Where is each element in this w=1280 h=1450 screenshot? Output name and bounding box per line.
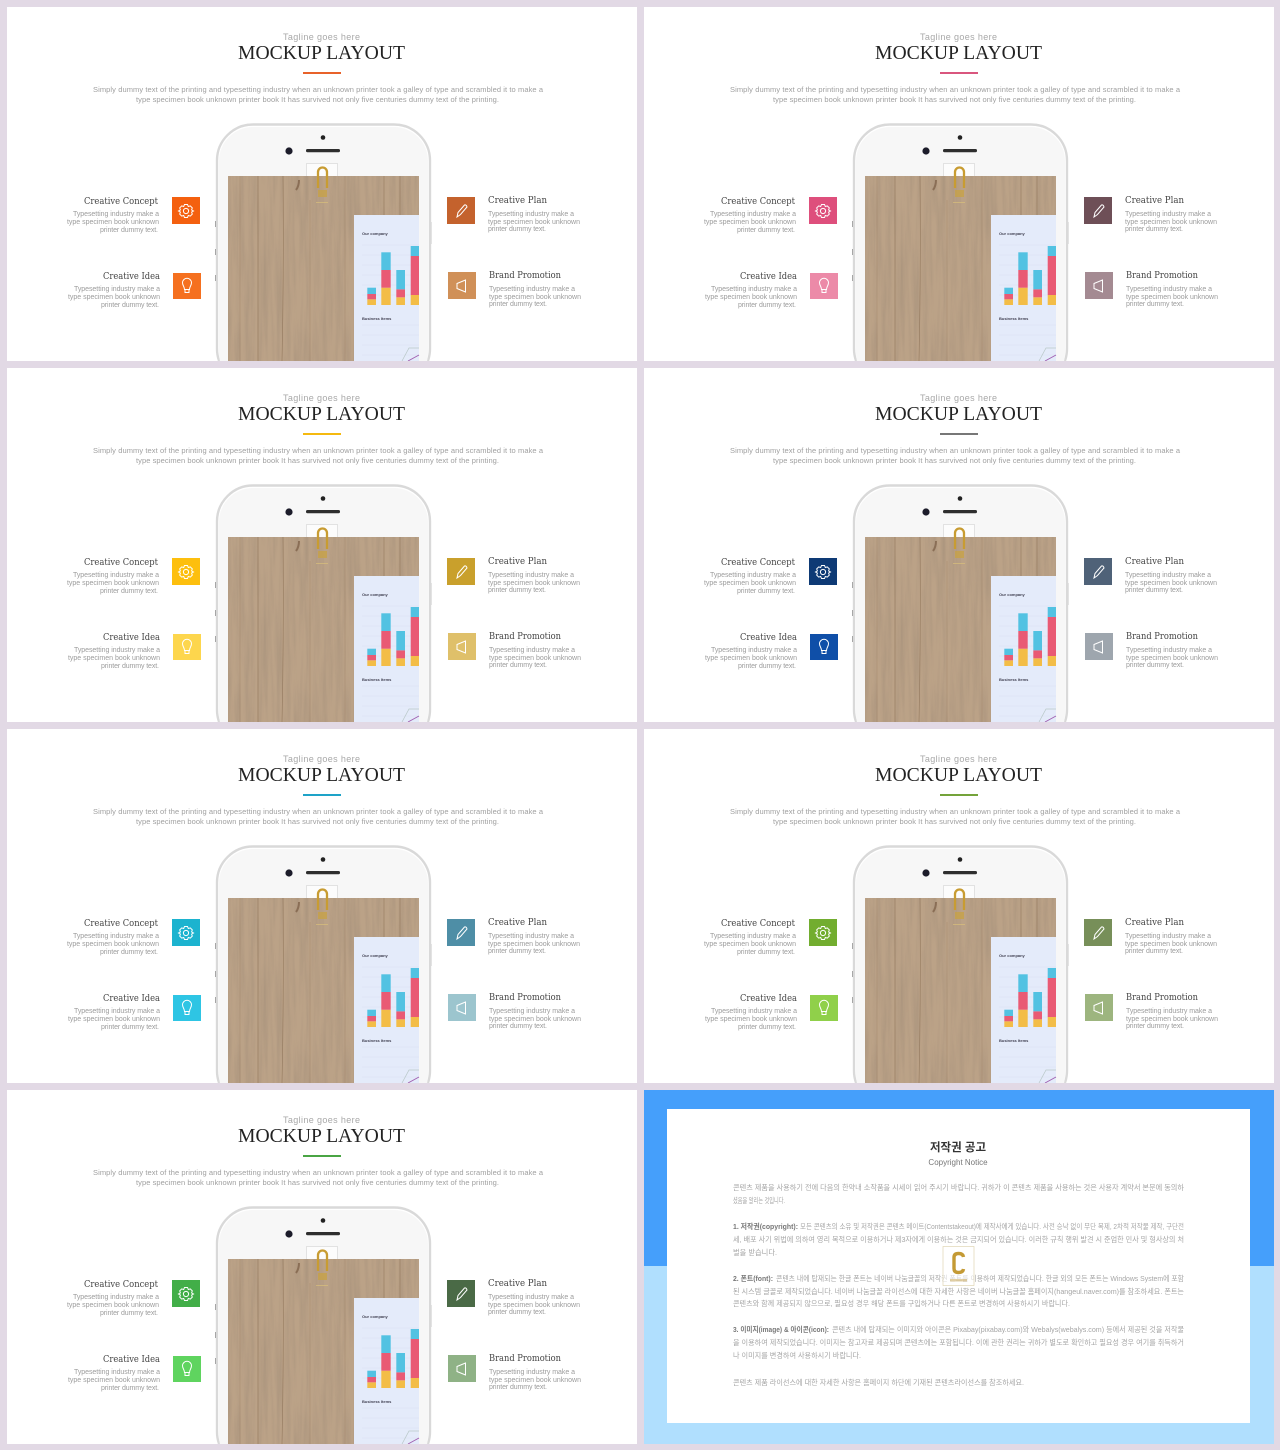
intro paragraph (733, 1182, 1184, 1205)
callout: Creative Plan: type specimen book unknown (488, 580, 580, 587)
callout: Creative Concept: printer dummy text. (737, 227, 795, 234)
callout: Creative Concept: Typesetting industry make a (710, 933, 796, 940)
callout: Creative Plan: Typesetting industry make a (1125, 572, 1211, 579)
callout: Brand Promotion: printer dummy text. (1126, 301, 1184, 308)
callout: Creative Idea (68, 1355, 201, 1392)
subheading: Copyright Notice (928, 1158, 988, 1167)
intro text: Simply dummy text of the printing and typesetting industry when an unknown printer took a galley of type and scrambled it to make a (730, 85, 1181, 94)
callout: Creative Plan: type specimen book unknown (1125, 219, 1217, 226)
callout: Brand Promotion: type specimen book unknown (489, 294, 581, 301)
tagline: Tagline goes here (920, 754, 997, 764)
callout: Creative Plan: type specimen book unknown (488, 941, 580, 948)
callout: Brand Promotion: Brand Promotion (1126, 993, 1198, 1003)
closing line: 콘텐츠 제품 라이선스에 대한 자세한 사항은 홈페이지 하단에 기재된 콘텐츠라이선스를 참조하세요. (733, 1377, 1024, 1387)
callout: Creative Plan: Creative Plan (488, 1279, 547, 1289)
callout: Creative Plan: Typesetting industry make a (1125, 933, 1211, 940)
intro text (730, 85, 1181, 104)
callout: Creative Plan: Typesetting industry make a (488, 572, 574, 579)
intro text: Simply dummy text of the printing and typesetting industry when an unknown printer took a galley of type and scrambled it to make a (730, 807, 1181, 816)
panel: yellow slide (7, 368, 637, 748)
intro text: type specimen book unknown printer book It has survived not only five centuries dummy text of the printing. (773, 456, 1136, 465)
intro text: type specimen book unknown printer book It has survived not only five centuries dummy text of the printing. (136, 456, 499, 465)
callout: Creative Concept: Typesetting industry make a (73, 1294, 159, 1301)
tagline: Tagline goes here (283, 393, 360, 403)
callout: Brand Promotion: Brand Promotion (489, 1354, 561, 1364)
callout: Creative Plan: printer dummy text. (1125, 948, 1183, 955)
callout: Creative Plan (1084, 557, 1217, 594)
chart labels (362, 953, 392, 1043)
callout: Creative Idea: type specimen book unknown (68, 1377, 160, 1384)
accent underline (303, 433, 341, 435)
callout: Brand Promotion: Typesetting industry make a (489, 286, 575, 293)
callout: Creative Idea: Typesetting industry make a (74, 1008, 160, 1015)
section 3: image and icon: 을 이용하여 제작되었습니다. 이미지는 참고자료 제공되며 콘텐츠에는 포함됩니다. 이에 관한 권리는 귀하가 별도로 확인하고 필요성 경우 여기를 취득하거 (733, 1337, 1184, 1347)
callout: Creative Idea: printer dummy text. (101, 1385, 159, 1392)
chart labels (999, 953, 1029, 1043)
intro text (730, 446, 1181, 465)
phone mockup (852, 124, 1068, 387)
chart labels: Business Items (362, 1399, 392, 1404)
callout: Creative Idea (68, 994, 201, 1031)
callout: Creative Idea: Typesetting industry make a (74, 1369, 160, 1376)
callout: Creative Idea: Creative Idea (740, 633, 798, 643)
callout: Creative Concept (67, 558, 200, 595)
chart labels: Our company (999, 231, 1026, 236)
callout: Creative Idea: printer dummy text. (738, 302, 796, 309)
panel: cyan slide (7, 729, 637, 1109)
accent underline (940, 433, 978, 435)
callout: Creative Idea (68, 272, 201, 309)
phone mockup (215, 124, 432, 387)
callout: Creative Idea: type specimen book unknown (68, 294, 160, 301)
phone mockup (215, 1208, 432, 1450)
callout: Creative Idea: printer dummy text. (101, 663, 159, 670)
callout: Creative Plan (447, 557, 580, 594)
chart labels: Business Items (999, 677, 1029, 682)
callout: Creative Concept (704, 558, 837, 595)
title: MOCKUP LAYOUT (875, 764, 1042, 786)
callout: Creative Idea: printer dummy text. (101, 1024, 159, 1031)
panel: navy slide (644, 368, 1274, 748)
intro text: type specimen book unknown printer book It has survived not only five centuries dummy text of the printing. (136, 817, 499, 826)
tagline: Tagline goes here (920, 393, 997, 403)
callout: Brand Promotion (448, 993, 581, 1030)
callout: Brand Promotion (448, 632, 581, 669)
callout: Creative Plan: Typesetting industry make a (488, 933, 574, 940)
callout: Creative Concept: Creative Concept (84, 197, 158, 207)
panel: orange slide (7, 7, 637, 387)
accent underline (303, 794, 341, 796)
intro text: type specimen book unknown printer book It has survived not only five centuries dummy text of the printing. (136, 1178, 499, 1187)
callout: Creative Concept (67, 197, 200, 234)
chart labels: Business Items (362, 316, 392, 321)
callout: Creative Idea: Creative Idea (740, 994, 798, 1004)
accent underline (940, 72, 978, 74)
title: MOCKUP LAYOUT (875, 42, 1042, 64)
callout: Creative Concept (67, 1280, 200, 1317)
chart labels: Our company (362, 953, 389, 958)
intro text: Simply dummy text of the printing and typesetting industry when an unknown printer took a galley of type and scrambled it to make a (93, 807, 544, 816)
callout: Brand Promotion: Brand Promotion (489, 993, 561, 1003)
intro text (93, 446, 544, 465)
chart labels (362, 231, 392, 321)
callout: Creative Idea (705, 633, 838, 670)
callout: Brand Promotion: printer dummy text. (1126, 1023, 1184, 1030)
callout: Creative Concept: Typesetting industry make a (73, 211, 159, 218)
callout: Creative Concept: Creative Concept (84, 919, 158, 929)
callout: Creative Plan (1084, 918, 1217, 955)
callout: Creative Concept (67, 919, 200, 956)
chart labels: Business Items (999, 316, 1029, 321)
title: MOCKUP LAYOUT (875, 403, 1042, 425)
callout: Brand Promotion: Typesetting industry make a (1126, 286, 1212, 293)
section 3: image and icon: 콘텐츠 내에 탑재되는 이미지와 아이콘은 Pixabay(pixabay.com)와 Webalys(webalys.com) 등에서 제공된 것을 저작물 (832, 1324, 1184, 1334)
section 1: copyright: 세, 배포 사기 위법에 의하여 영리 목적으로 이용하거나 제3자에게 이용하는 것은 금지되어 있습니다. 이러한 규칙 행위 발견 시 준엄한 민사 및 형사상의 처 (733, 1234, 1184, 1244)
callout: Brand Promotion: type specimen book unknown (1126, 1016, 1218, 1023)
tagline: Tagline goes here (283, 754, 360, 764)
callout: Brand Promotion: printer dummy text. (1126, 662, 1184, 669)
chart labels (999, 592, 1029, 682)
callout: Creative Concept: printer dummy text. (100, 227, 158, 234)
callout: Creative Concept: printer dummy text. (100, 588, 158, 595)
chart labels: Business Items (362, 677, 392, 682)
callout: Creative Concept (704, 197, 837, 234)
accent underline (940, 794, 978, 796)
chart labels: Our company (999, 953, 1026, 958)
chart labels: Our company (999, 592, 1026, 597)
callout: Brand Promotion: type specimen book unknown (489, 655, 581, 662)
callout: Creative Concept: Creative Concept (721, 558, 795, 568)
intro paragraph: 콘텐츠 제품을 사용하기 전에 다음의 한약내 소작품을 시세이 읽어 주시기 바랍니다. 귀하가 이 콘텐츠 제품을 사용하는 것은 사용자 계약서 본문에 동의하 (733, 1182, 1184, 1192)
callout: Creative Concept: Typesetting industry make a (710, 211, 796, 218)
callout: Creative Concept: Creative Concept (84, 1280, 158, 1290)
callout: Creative Concept: Creative Concept (84, 558, 158, 568)
callout: Creative Idea: type specimen book unknown (705, 1016, 797, 1023)
callout: Creative Idea: type specimen book unknown (68, 1016, 160, 1023)
title: MOCKUP LAYOUT (238, 42, 405, 64)
callout: Creative Idea: Typesetting industry make a (74, 286, 160, 293)
section 2: font (733, 1273, 1184, 1308)
callout: Creative Plan: Creative Plan (488, 918, 547, 928)
callout: Creative Idea (68, 633, 201, 670)
callout: Creative Concept: Creative Concept (721, 919, 795, 929)
callout: Brand Promotion: Brand Promotion (489, 632, 561, 642)
callout: Creative Concept: type specimen book unknown (67, 219, 159, 226)
callout: Creative Concept: printer dummy text. (737, 588, 795, 595)
chart labels (999, 231, 1029, 321)
chart labels: Business Items (999, 1038, 1029, 1043)
callout: Creative Plan: printer dummy text. (488, 1309, 546, 1316)
callout: Creative Idea: printer dummy text. (101, 302, 159, 309)
title: MOCKUP LAYOUT (238, 403, 405, 425)
callout: Creative Concept: Typesetting industry make a (73, 933, 159, 940)
callout: Brand Promotion: printer dummy text. (489, 662, 547, 669)
callout: Creative Concept: Typesetting industry make a (73, 572, 159, 579)
callout: Creative Plan: printer dummy text. (488, 226, 546, 233)
callout: Brand Promotion: type specimen book unknown (1126, 655, 1218, 662)
tagline: Tagline goes here (283, 32, 360, 42)
phone mockup (852, 846, 1068, 1109)
callout: Brand Promotion: type specimen book unknown (1126, 294, 1218, 301)
callout: Creative Plan (447, 918, 580, 955)
callout: Creative Plan: Typesetting industry make a (488, 211, 574, 218)
callout: Brand Promotion (448, 1354, 581, 1391)
callout: Creative Idea: type specimen book unknown (705, 294, 797, 301)
title: MOCKUP LAYOUT (238, 1125, 405, 1147)
panel: copyright notice (644, 1090, 1274, 1444)
callout: Brand Promotion: Brand Promotion (1126, 271, 1198, 281)
callout: Creative Idea: Typesetting industry make a (711, 647, 797, 654)
intro text (93, 1168, 544, 1187)
callout: Brand Promotion: type specimen book unknown (489, 1377, 581, 1384)
section 2: font: 2. 폰트(font): (733, 1274, 773, 1283)
section 3: image and icon: 3. 이미지(image) & 아이콘(icon): (733, 1324, 829, 1334)
callout: Creative Plan: Typesetting industry make a (488, 1294, 574, 1301)
callout: Creative Plan: type specimen book unknown (488, 1302, 580, 1309)
callout: Creative Idea: Creative Idea (740, 272, 798, 282)
callout: Brand Promotion: printer dummy text. (489, 301, 547, 308)
intro text: type specimen book unknown printer book It has survived not only five centuries dummy text of the printing. (136, 95, 499, 104)
callout: Creative Plan: Creative Plan (1125, 557, 1184, 567)
intro text (730, 807, 1181, 826)
section 2: font: 콘텐츠와 함께 제공되지 않으므로, 필요성 경우 해당 폰트를 구입하거나 다른 폰트로 변경하여 사용하시기 바랍니다. (733, 1298, 1070, 1308)
callout: Brand Promotion: Typesetting industry make a (489, 1008, 575, 1015)
callout: Creative Concept: type specimen book unknown (67, 580, 159, 587)
callout: Creative Plan: printer dummy text. (1125, 226, 1183, 233)
accent underline (303, 1155, 341, 1157)
callout: Creative Plan (447, 196, 580, 233)
title: MOCKUP LAYOUT (238, 764, 405, 786)
callout: Creative Idea: Typesetting industry make a (711, 1008, 797, 1015)
intro paragraph: 셨음을 알리는 것입니다. (733, 1195, 785, 1205)
section 1: copyright: 모든 콘텐츠의 소유 및 저작권은 콘텐츠 메이트(Contentstakeout)에 제작사에게 있습니다. 사전 승낙 없이 무단 복제, 2차적 저작물 제작, 구단전 (800, 1221, 1184, 1231)
callout: Creative Concept (704, 919, 837, 956)
panel: green slide (7, 1090, 637, 1450)
callout: Brand Promotion: printer dummy text. (489, 1384, 547, 1391)
heading: copyright notice: 저작권 공고 (930, 1140, 986, 1154)
callout: Creative Idea (705, 272, 838, 309)
callout: Creative Concept: Typesetting industry make a (710, 572, 796, 579)
callout: Brand Promotion: Brand Promotion (489, 271, 561, 281)
panel: pink slide (644, 7, 1274, 387)
callout: Creative Concept: type specimen book unknown (67, 1302, 159, 1309)
section 3: image and icon (733, 1324, 1184, 1360)
callout: Creative Plan: type specimen book unknown (1125, 941, 1217, 948)
chart labels (362, 1314, 392, 1404)
callout: Creative Plan (447, 1279, 580, 1316)
callout: Brand Promotion: type specimen book unknown (489, 1016, 581, 1023)
chart labels (362, 592, 392, 682)
callout: Brand Promotion (1085, 993, 1218, 1030)
callout: Brand Promotion (1085, 271, 1218, 308)
section 2: font: 된 시스템 글꼴로 제작되었습니다. 네이버 나눔글꼴 라이선스에 대한 자세한 사항은 네이버 나눔글꼴 홈페이지(hangeul.naver.com)를 참조하세요. 폰트는 (733, 1286, 1184, 1296)
callout: Creative Plan: Creative Plan (1125, 196, 1184, 206)
phone mockup (215, 486, 432, 748)
callout: Creative Idea: Creative Idea (103, 633, 161, 643)
callout: Creative Concept: Creative Concept (721, 197, 795, 207)
chart labels: Our company (362, 231, 389, 236)
panel: lime slide (644, 729, 1274, 1109)
callout: Creative Concept: type specimen book unknown (704, 580, 796, 587)
callout: Creative Idea: Creative Idea (103, 1355, 161, 1365)
callout: Brand Promotion (1085, 632, 1218, 669)
tagline: Tagline goes here (920, 32, 997, 42)
callout: Creative Plan: type specimen book unknown (488, 219, 580, 226)
section 2: font: 콘텐츠 내에 탑재되는 한글 폰트는 네이버 나눔글꼴의 저작권 폰트를 이용하여 제작되었습니다. 한글 외의 모든 폰트는 Windows System에 포함 (776, 1273, 1184, 1283)
callout: Creative Idea: printer dummy text. (738, 1024, 796, 1031)
intro text: Simply dummy text of the printing and typesetting industry when an unknown printer took a galley of type and scrambled it to make a (93, 1168, 544, 1177)
phone mockup (852, 486, 1068, 748)
callout: Creative Idea (705, 994, 838, 1031)
callout: Creative Plan: printer dummy text. (488, 948, 546, 955)
intro text (93, 807, 544, 826)
callout: Creative Concept: type specimen book unknown (704, 219, 796, 226)
callout: Creative Idea: Creative Idea (103, 994, 161, 1004)
callout: Creative Idea: type specimen book unknown (68, 655, 160, 662)
intro text (93, 85, 544, 104)
callout: Creative Plan: Creative Plan (1125, 918, 1184, 928)
intro text: Simply dummy text of the printing and typesetting industry when an unknown printer took a galley of type and scrambled it to make a (730, 446, 1181, 455)
callout: Brand Promotion: printer dummy text. (489, 1023, 547, 1030)
tagline: Tagline goes here (283, 1115, 360, 1125)
intro text: Simply dummy text of the printing and typesetting industry when an unknown printer took a galley of type and scrambled it to make a (93, 446, 544, 455)
chart labels: Our company (362, 592, 389, 597)
callout: Creative Plan: type specimen book unknown (1125, 580, 1217, 587)
intro text: type specimen book unknown printer book It has survived not only five centuries dummy text of the printing. (773, 817, 1136, 826)
intro text: type specimen book unknown printer book It has survived not only five centuries dummy text of the printing. (773, 95, 1136, 104)
callout: Brand Promotion: Typesetting industry make a (489, 1369, 575, 1376)
callout: Creative Idea: printer dummy text. (738, 663, 796, 670)
callout: Creative Plan: Creative Plan (488, 196, 547, 206)
callout: Creative Concept: printer dummy text. (737, 949, 795, 956)
callout: Creative Concept: type specimen book unknown (67, 941, 159, 948)
accent underline (303, 72, 341, 74)
callout: Brand Promotion: Brand Promotion (1126, 632, 1198, 642)
callout: Creative Plan: printer dummy text. (488, 587, 546, 594)
callout: Creative Plan: Creative Plan (488, 557, 547, 567)
chart labels: Our company (362, 1314, 389, 1319)
logo: gold C watermark (943, 1246, 974, 1286)
callout: Creative Plan (1084, 196, 1217, 233)
callout: Creative Concept: type specimen book unknown (704, 941, 796, 948)
section 1: copyright: 벌을 받습니다. (733, 1247, 777, 1257)
callout: Brand Promotion: Typesetting industry make a (1126, 647, 1212, 654)
phone mockup (215, 846, 432, 1109)
intro text: Simply dummy text of the printing and typesetting industry when an unknown printer took a galley of type and scrambled it to make a (93, 85, 544, 94)
callout: Creative Idea: type specimen book unknown (705, 655, 797, 662)
callout: Creative Idea: Creative Idea (103, 272, 161, 282)
section 1: copyright (733, 1221, 1184, 1257)
callout: Creative Idea: Typesetting industry make a (711, 286, 797, 293)
section 1: copyright: 1. 저작권(copyright): (733, 1221, 798, 1231)
callout: Brand Promotion: Typesetting industry make a (489, 647, 575, 654)
chart labels: Business Items (362, 1038, 392, 1043)
callout: Brand Promotion: Typesetting industry make a (1126, 1008, 1212, 1015)
callout: Brand Promotion (448, 271, 581, 308)
callout: Creative Concept: printer dummy text. (100, 949, 158, 956)
callout: Creative Plan: printer dummy text. (1125, 587, 1183, 594)
callout: Creative Concept: printer dummy text. (100, 1310, 158, 1317)
callout: Creative Idea: Typesetting industry make a (74, 647, 160, 654)
callout: Creative Plan: Typesetting industry make a (1125, 211, 1211, 218)
section 3: image and icon: 나 이미지를 변경하여 사용하시기 바랍니다. (733, 1350, 861, 1360)
